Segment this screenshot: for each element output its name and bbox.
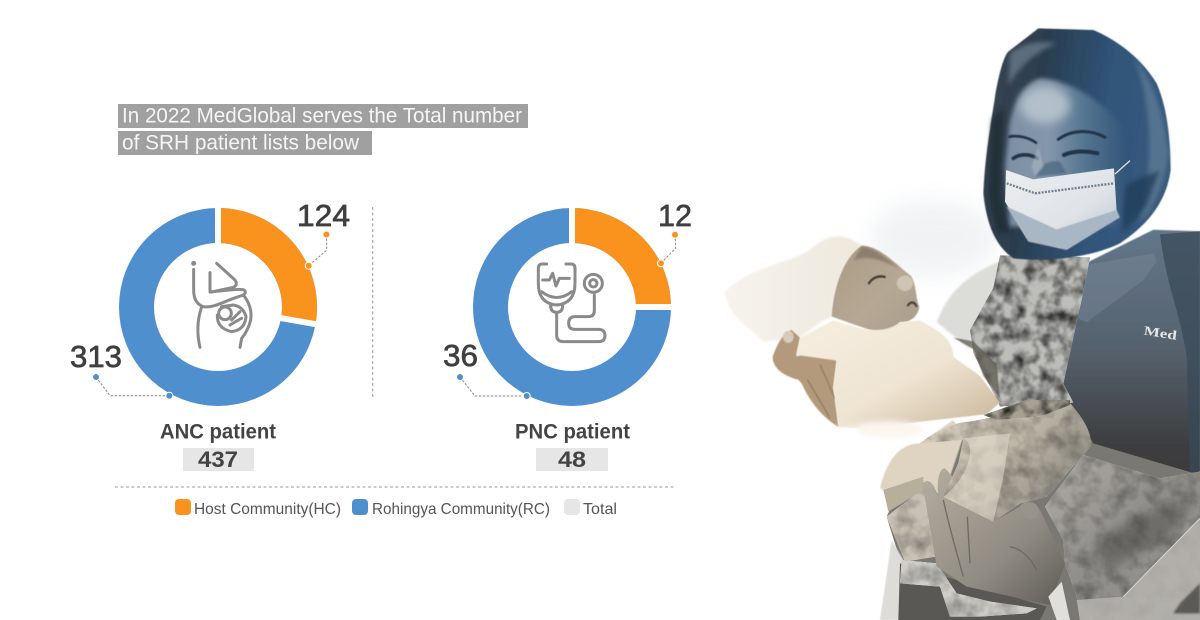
title	[118, 104, 528, 155]
PNC Rohingya leader line	[460, 377, 527, 396]
head and mask	[983, 28, 1171, 260]
title line 2: of SRH patient lists below	[122, 132, 360, 154]
PNC host value: 12	[658, 198, 692, 233]
horizontal divider	[115, 486, 674, 488]
legend swatch: total	[564, 499, 580, 515]
white fade over blanket	[818, 428, 895, 481]
ANC host leader line	[309, 234, 327, 266]
baby blanket	[796, 320, 1000, 429]
panel: PNC donut chart	[443, 198, 692, 472]
PNC host leader line	[661, 235, 676, 263]
ANC Rohingya leader line	[96, 377, 169, 396]
title highlight bars	[118, 104, 528, 155]
ANC total value: 437	[198, 447, 238, 472]
ANC total box	[183, 448, 254, 471]
hood highlights	[988, 42, 1168, 233]
left blanket	[880, 420, 963, 497]
icon: pregnant body	[193, 262, 251, 347]
forehead highlight	[1020, 87, 1070, 123]
vertical divider	[372, 207, 374, 398]
baby hat	[725, 236, 862, 341]
baby face	[832, 246, 919, 336]
wrap cloth held in arm	[920, 400, 1091, 522]
ANC Rohingya value: 313	[70, 339, 122, 374]
icon: stethoscope	[538, 264, 605, 342]
legend	[175, 499, 617, 518]
white coat behind baby	[937, 261, 1000, 349]
cuff of coat left	[880, 540, 903, 620]
hood	[983, 28, 1171, 260]
face	[1005, 78, 1130, 227]
ANC label: ANC patient	[160, 420, 276, 444]
sleeve	[1045, 455, 1200, 620]
lace	[900, 560, 1037, 617]
hand	[923, 468, 1065, 605]
PNC total box	[536, 448, 608, 471]
legend swatch: host community	[175, 499, 191, 515]
ANC donut ring	[136, 200, 322, 388]
legend swatch: Rohingya community	[352, 499, 368, 515]
upper body and baby	[725, 200, 1200, 494]
lower body and hands	[880, 400, 1200, 620]
PNC donut ring	[490, 200, 678, 388]
title line 1: In 2022 MedGlobal serves the Total number	[122, 104, 522, 128]
PNC Rohingya value: 36	[443, 338, 478, 373]
eyebrows and eyes	[1009, 132, 1105, 158]
legend label: host community: Host Community(HC)	[194, 501, 341, 518]
printed neck scarf	[970, 255, 1090, 406]
coat	[1053, 230, 1200, 494]
photo: health worker holding newborn	[725, 28, 1200, 620]
coat logo text: Med	[1143, 323, 1178, 343]
nose	[1035, 161, 1067, 177]
cuff	[1048, 582, 1070, 620]
body underlay	[887, 403, 1200, 620]
legend label: total: Total	[583, 501, 617, 518]
mother's left hand	[773, 330, 839, 427]
patterned cloth	[887, 488, 935, 562]
ANC host value: 124	[297, 198, 350, 233]
panel: ANC donut chart	[70, 198, 350, 472]
PNC label: PNC patient	[515, 420, 630, 444]
legend label: Rohingya community: Rohingya Community(RC)	[372, 501, 550, 518]
PNC total value: 48	[558, 447, 586, 472]
soft background haze	[870, 200, 997, 276]
surgical mask	[1005, 161, 1130, 250]
dress	[898, 563, 1047, 620]
